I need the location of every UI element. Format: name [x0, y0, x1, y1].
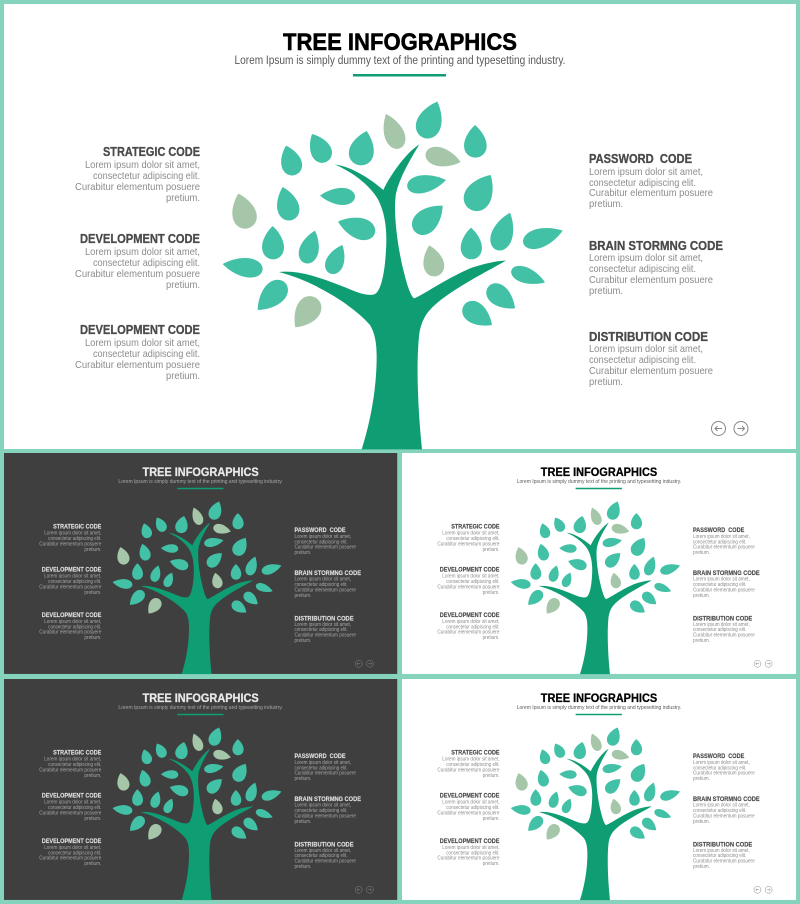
- text block: right column: pretium.: [693, 593, 710, 599]
- text block: right column: DISTRIBUTION CODE: [693, 615, 752, 622]
- panel: small dark slide, row 2: [4, 679, 397, 900]
- title underline: [177, 488, 223, 489]
- text block: left column: consectetur adipiscing elit.: [48, 850, 101, 856]
- text block: right column: Lorem ipsum dolor sit amet,: [693, 622, 750, 628]
- text block: left column: pretium.: [483, 861, 500, 867]
- text block: left column: Lorem ipsum dolor sit amet,: [44, 845, 101, 851]
- text block: strategic code: Lorem ipsum dolor sit amet,: [85, 159, 200, 171]
- icon: left arrow: [712, 422, 726, 436]
- text block: right column: Curabitur elementum posuere: [693, 859, 755, 865]
- text block: right column: Curabitur elementum posuere: [294, 588, 356, 594]
- tree illustration: [510, 725, 681, 900]
- text block: left column: DEVELOPMENT CODE: [42, 612, 101, 619]
- tree trunk and branches: [279, 144, 506, 449]
- text block: right column: Curabitur elementum posuere: [693, 544, 755, 550]
- text block: right column: pretium.: [294, 593, 311, 599]
- text block: right column: consectetur adipiscing elit.: [693, 627, 746, 633]
- text block: right column: Curabitur elementum posuere: [693, 588, 755, 594]
- text block: left column: [437, 523, 500, 641]
- title: TREE INFOGRAPHICS: [283, 29, 517, 56]
- text block: left column: Lorem ipsum dolor sit amet,: [44, 530, 101, 536]
- text block: password code: Curabitur elementum posuere: [589, 187, 713, 199]
- title: TREE INFOGRAPHICS: [143, 465, 259, 479]
- text block: distribution code: [589, 330, 713, 388]
- text block: right column: consectetur adipiscing elit.: [693, 765, 746, 771]
- title: TREE INFOGRAPHICS: [143, 691, 259, 705]
- text block: right column: consectetur adipiscing elit.: [294, 853, 348, 859]
- text block: left column: Lorem ipsum dolor sit amet,: [44, 574, 101, 580]
- text block: brain storming code: pretium.: [589, 285, 623, 297]
- text block: strategic code: consectetur adipiscing elit.: [93, 170, 200, 182]
- text block: left column: pretium.: [483, 590, 500, 596]
- text block: left column: Lorem ipsum dolor sit amet,: [44, 619, 101, 625]
- text block: left column: consectetur adipiscing elit.: [48, 805, 101, 811]
- text block: left column: Curabitur elementum posuere: [437, 541, 500, 547]
- navigation arrows: [754, 660, 772, 667]
- text block: development code 2: DEVELOPMENT CODE: [80, 323, 200, 337]
- text block: right column: pretium.: [693, 819, 710, 825]
- text block: right column: DISTRIBUTION CODE: [693, 841, 752, 848]
- text block: right column: Lorem ipsum dolor sit amet,: [294, 577, 351, 583]
- text block: right column: Lorem ipsum dolor sit amet,: [693, 577, 750, 583]
- text block: right column: [294, 527, 361, 644]
- text block: right column: consectetur adipiscing elit.: [294, 627, 348, 633]
- subtitle: Lorem Ipsum is simply dummy text of the printing and typesetting industry.: [234, 55, 566, 67]
- panel: small dark slide, row 1: [4, 453, 397, 674]
- text block: right column: Curabitur elementum posuere: [294, 633, 356, 639]
- text block: right column: Lorem ipsum dolor sit amet,: [294, 760, 351, 766]
- subtitle: Lorem Ipsum is simply dummy text of the printing and typesetting industry.: [118, 479, 283, 485]
- panel: small light slide, row 1: [402, 453, 796, 674]
- text block: left column: consectetur adipiscing elit.: [48, 762, 101, 768]
- text block: left column: DEVELOPMENT CODE: [42, 838, 101, 845]
- subtitle: Lorem Ipsum is simply dummy text of the printing and typesetting industry.: [517, 479, 682, 485]
- text block: left column: [437, 749, 500, 867]
- text block: left column: consectetur adipiscing elit.: [48, 579, 101, 585]
- text block: left column: pretium.: [84, 635, 101, 641]
- text block: left column: Curabitur elementum posuere: [437, 856, 500, 862]
- text block: left column: consectetur adipiscing elit.: [446, 762, 500, 768]
- text block: left column: consectetur adipiscing elit.: [446, 624, 500, 630]
- text block: left column: consectetur adipiscing elit.: [48, 624, 101, 630]
- text block: right column: pretium.: [693, 550, 710, 556]
- text block: left column: DEVELOPMENT CODE: [440, 612, 500, 619]
- text block: brain storming code: Lorem ipsum dolor sit amet,: [589, 252, 703, 264]
- text block: strategic code: Curabitur elementum posuere: [75, 181, 200, 193]
- text block: development code 1: Lorem ipsum dolor sit amet,: [85, 246, 200, 258]
- text block: right column: Lorem ipsum dolor sit amet,: [294, 848, 351, 854]
- text block: left column: Lorem ipsum dolor sit amet,: [442, 845, 500, 851]
- sage leaves: [227, 110, 463, 334]
- text block: left column: Curabitur elementum posuere: [39, 767, 101, 773]
- text block: left column: STRATEGIC CODE: [53, 749, 101, 756]
- subtitle: Lorem Ipsum is simply dummy text of the printing and typesetting industry.: [118, 705, 283, 711]
- text block: development code 1: DEVELOPMENT CODE: [80, 232, 200, 246]
- text block: right column: DISTRIBUTION CODE: [294, 615, 354, 622]
- text block: right column: PASSWORD CODE: [294, 527, 346, 534]
- text block: right column: pretium.: [294, 864, 311, 870]
- text block: right column: pretium.: [693, 864, 710, 870]
- text block: right column: consectetur adipiscing elit.: [693, 808, 746, 814]
- text block: right column: DISTRIBUTION CODE: [294, 841, 354, 848]
- text block: right column: consectetur adipiscing elit.: [693, 539, 746, 545]
- navigation arrows: [355, 660, 373, 667]
- navigation arrows: [712, 422, 748, 436]
- text block: distribution code: Lorem ipsum dolor sit amet,: [589, 343, 703, 355]
- text block: distribution code: consectetur adipiscing elit.: [589, 354, 696, 366]
- text block: left column: Curabitur elementum posuere: [39, 856, 101, 862]
- text block: left column: pretium.: [483, 547, 500, 553]
- text block: right column: PASSWORD CODE: [294, 753, 346, 760]
- text block: left column: DEVELOPMENT CODE: [440, 793, 500, 800]
- text block: left column: Curabitur elementum posuere: [39, 585, 101, 591]
- text block: right column: consectetur adipiscing elit.: [294, 582, 348, 588]
- text block: right column: Curabitur elementum posuere: [294, 544, 356, 550]
- text block: right column: Curabitur elementum posuere: [693, 633, 755, 639]
- navigation arrows: [355, 886, 373, 893]
- text block: development code 2: pretium.: [166, 370, 200, 382]
- text block: development code 2: Lorem ipsum dolor sit amet,: [85, 337, 200, 349]
- text block: left column: Curabitur elementum posuere: [437, 585, 500, 591]
- text block: left column: Curabitur elementum posuere: [39, 541, 101, 547]
- text block: password code: [589, 152, 713, 210]
- text block: left column: Lorem ipsum dolor sit amet,: [442, 619, 500, 625]
- text block: left column: DEVELOPMENT CODE: [42, 567, 101, 574]
- text block: password code: pretium.: [589, 198, 623, 210]
- text block: right column: consectetur adipiscing elit.: [693, 853, 746, 859]
- text block: right column: PASSWORD CODE: [693, 527, 744, 534]
- text block: left column: DEVELOPMENT CODE: [440, 838, 500, 845]
- text block: development code 2: [75, 323, 200, 382]
- text block: left column: Lorem ipsum dolor sit amet,: [442, 574, 500, 580]
- tree illustration: [510, 499, 681, 674]
- text block: right column: Curabitur elementum posuere: [294, 814, 356, 820]
- text block: right column: Lorem ipsum dolor sit amet,: [693, 848, 750, 854]
- text block: right column: [693, 753, 760, 870]
- text block: right column: pretium.: [294, 819, 311, 825]
- text block: left column: pretium.: [84, 590, 101, 596]
- navigation arrows: [754, 886, 772, 893]
- text block: strategic code: STRATEGIC CODE: [103, 145, 200, 159]
- title: TREE INFOGRAPHICS: [541, 691, 657, 705]
- text block: right column: BRAIN STORMNG CODE: [294, 570, 361, 577]
- text block: left column: consectetur adipiscing elit.: [446, 850, 500, 856]
- title underline: [576, 488, 622, 489]
- text block: left column: pretium.: [84, 861, 101, 867]
- text block: development code 1: pretium.: [166, 279, 200, 291]
- text block: left column: DEVELOPMENT CODE: [440, 567, 500, 574]
- text block: right column: consectetur adipiscing elit.: [294, 539, 348, 545]
- text block: right column: pretium.: [294, 550, 311, 556]
- text block: brain storming code: BRAIN STORMNG CODE: [589, 239, 723, 253]
- title: TREE INFOGRAPHICS: [541, 465, 657, 479]
- text block: left column: Curabitur elementum posuere: [437, 767, 500, 773]
- text block: strategic code: [75, 145, 200, 204]
- text block: left column: Lorem ipsum dolor sit amet,: [442, 756, 500, 762]
- text block: left column: consectetur adipiscing elit.: [446, 805, 500, 811]
- text block: right column: Lorem ipsum dolor sit amet,: [693, 803, 750, 809]
- text block: left column: STRATEGIC CODE: [451, 749, 500, 756]
- subtitle: Lorem Ipsum is simply dummy text of the printing and typesetting industry.: [517, 705, 682, 711]
- text block: right column: PASSWORD CODE: [693, 753, 744, 760]
- tree illustration: [112, 725, 283, 900]
- text block: right column: Lorem ipsum dolor sit amet,: [294, 803, 351, 809]
- text block: left column: Lorem ipsum dolor sit amet,: [44, 756, 101, 762]
- text block: left column: Curabitur elementum posuere: [437, 630, 500, 636]
- text block: right column: Lorem ipsum dolor sit amet,: [693, 534, 750, 540]
- text block: distribution code: DISTRIBUTION CODE: [589, 330, 708, 344]
- text block: left column: pretium.: [483, 773, 500, 779]
- text block: left column: pretium.: [84, 547, 101, 553]
- text block: development code 1: [75, 232, 200, 291]
- text block: right column: Curabitur elementum posuere: [294, 859, 356, 865]
- title underline: [576, 714, 622, 715]
- text block: right column: consectetur adipiscing elit.: [693, 582, 746, 588]
- text block: left column: pretium.: [483, 635, 500, 641]
- green leaves: [221, 97, 566, 334]
- text block: right column: Curabitur elementum posuere: [693, 770, 755, 776]
- text block: password code: consectetur adipiscing elit.: [589, 177, 696, 189]
- panel: main light slide: [4, 4, 796, 449]
- text block: brain storming code: Curabitur elementum posuere: [589, 274, 713, 286]
- text block: right column: [693, 527, 760, 644]
- title underline: [353, 74, 446, 76]
- text block: left column: DEVELOPMENT CODE: [42, 793, 101, 800]
- text block: left column: Lorem ipsum dolor sit amet,: [44, 800, 101, 806]
- text block: password code: PASSWORD CODE: [589, 152, 692, 166]
- text block: right column: BRAIN STORMNG CODE: [693, 570, 760, 577]
- text block: left column: [39, 523, 101, 641]
- text block: right column: Lorem ipsum dolor sit amet,: [294, 622, 351, 628]
- text block: strategic code: pretium.: [166, 192, 200, 204]
- text block: distribution code: pretium.: [589, 376, 623, 388]
- text block: right column: Lorem ipsum dolor sit amet,: [693, 760, 750, 766]
- text block: left column: consectetur adipiscing elit.: [48, 536, 101, 542]
- text block: left column: consectetur adipiscing elit.: [446, 536, 500, 542]
- text block: right column: pretium.: [294, 638, 311, 644]
- text block: left column: STRATEGIC CODE: [451, 523, 500, 530]
- tree illustration: [221, 97, 566, 449]
- text block: distribution code: Curabitur elementum posuere: [589, 365, 713, 377]
- text block: password code: Lorem ipsum dolor sit amet,: [589, 166, 703, 178]
- text block: left column: Lorem ipsum dolor sit amet,: [442, 800, 500, 806]
- text block: right column: pretium.: [693, 776, 710, 782]
- text block: right column: Curabitur elementum posuere: [294, 770, 356, 776]
- panel: small light slide, row 2: [402, 679, 796, 900]
- text block: left column: Curabitur elementum posuere: [437, 811, 500, 817]
- text block: left column: pretium.: [84, 773, 101, 779]
- text block: right column: BRAIN STORMNG CODE: [693, 796, 760, 803]
- text block: brain storming code: [589, 239, 723, 297]
- text block: left column: Curabitur elementum posuere: [39, 630, 101, 636]
- text block: right column: pretium.: [693, 638, 710, 644]
- text block: brain storming code: consectetur adipiscing elit.: [589, 263, 696, 275]
- text block: right column: consectetur adipiscing elit.: [294, 808, 348, 814]
- text block: right column: [294, 753, 361, 870]
- text block: right column: BRAIN STORMNG CODE: [294, 796, 361, 803]
- text block: left column: Lorem ipsum dolor sit amet,: [442, 530, 500, 536]
- text block: left column: Curabitur elementum posuere: [39, 811, 101, 817]
- text block: development code 2: Curabitur elementum posuere: [75, 359, 200, 371]
- text block: left column: consectetur adipiscing elit.: [446, 579, 500, 585]
- text block: right column: consectetur adipiscing elit.: [294, 765, 348, 771]
- text block: development code 2: consectetur adipiscing elit.: [93, 348, 200, 360]
- text block: left column: STRATEGIC CODE: [53, 523, 101, 530]
- title underline: [177, 714, 223, 715]
- text block: left column: pretium.: [483, 816, 500, 822]
- text block: right column: Lorem ipsum dolor sit amet,: [294, 534, 351, 540]
- icon: right arrow: [734, 422, 748, 436]
- text block: right column: pretium.: [294, 776, 311, 782]
- text block: left column: pretium.: [84, 816, 101, 822]
- text block: left column: [39, 749, 101, 867]
- text block: right column: Curabitur elementum posuere: [693, 814, 755, 820]
- text block: development code 1: Curabitur elementum posuere: [75, 268, 200, 280]
- text block: development code 1: consectetur adipiscing elit.: [93, 257, 200, 269]
- tree illustration: [112, 499, 283, 674]
